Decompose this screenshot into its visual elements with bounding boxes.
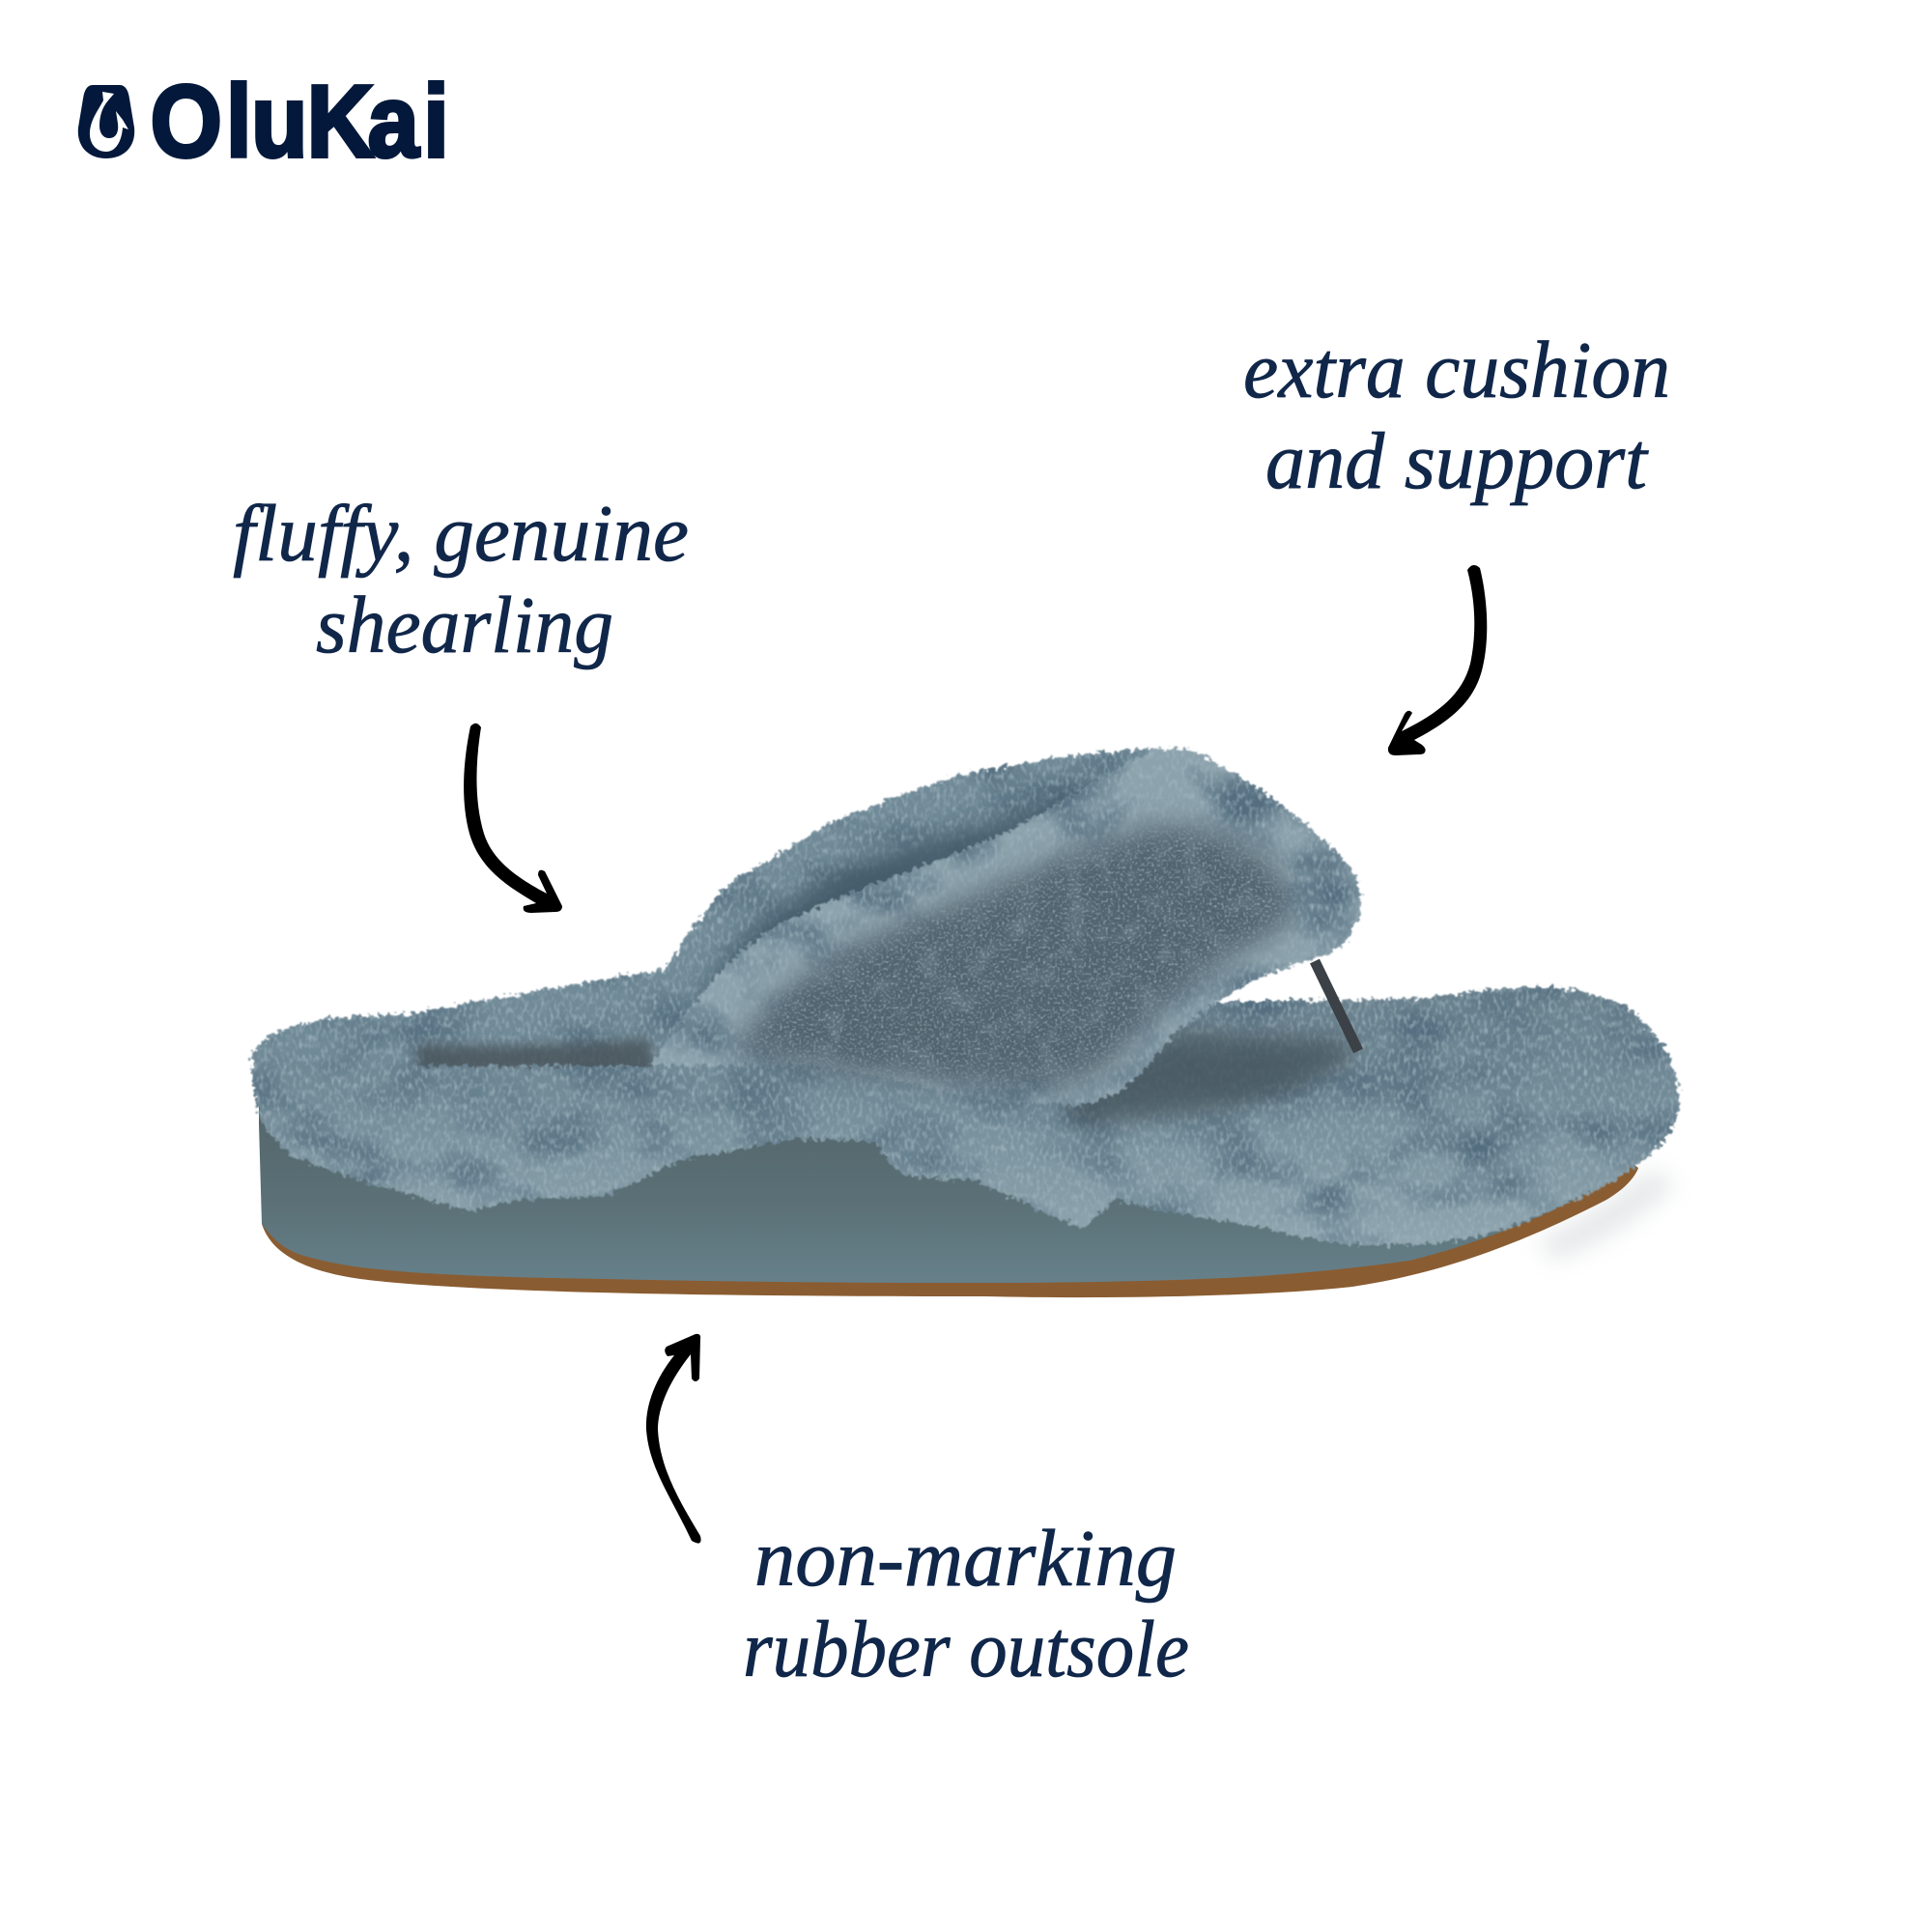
toe bed and side fur — [252, 987, 1679, 1245]
logo: OluKai — [78, 65, 449, 179]
caption: non-marking rubber outsole: rubber outsole — [743, 1605, 1189, 1694]
midsole — [259, 1101, 1627, 1283]
caption: extra cushion and support: extra cushion — [1243, 326, 1670, 415]
caption: extra cushion and support — [1243, 326, 1670, 506]
wordmark: OluKai — [151, 65, 449, 179]
arrow: outsole — [646, 1334, 701, 1544]
caption: extra cushion and support: and support — [1265, 416, 1650, 506]
thong post — [1315, 961, 1358, 1051]
caption: non-marking rubber outsole: non-marking — [754, 1514, 1177, 1604]
caption: non-marking rubber outsole — [743, 1514, 1189, 1694]
heel cup dark band — [417, 1037, 657, 1074]
strap shadow on footbed — [1063, 1032, 1352, 1125]
caption: fluffy, genuine shearling — [233, 489, 689, 670]
arrow: extra cushion to strap — [1388, 565, 1487, 755]
icon: fish hook badge — [78, 85, 134, 158]
strap dark centre — [734, 827, 1291, 1084]
arrow: shearling to heel — [464, 724, 562, 913]
ground shadow — [1536, 1169, 1676, 1261]
strap inner shadow — [696, 787, 1092, 1038]
caption: fluffy, genuine shearling: shearling — [316, 581, 613, 670]
front strap fur — [651, 749, 1361, 1105]
slipper — [252, 749, 1679, 1297]
caption: fluffy, genuine shearling: fluffy, genuine — [233, 489, 689, 579]
outsole — [262, 1159, 1638, 1297]
back strap and heel rim fur — [252, 749, 1198, 1077]
